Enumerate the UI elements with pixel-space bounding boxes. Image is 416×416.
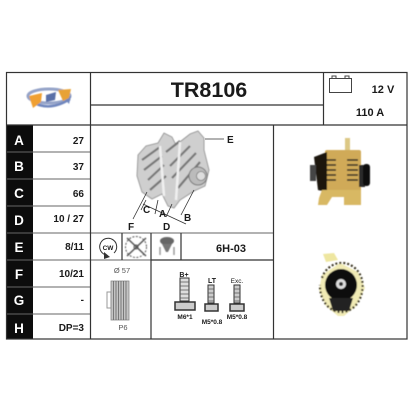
icon: regulator (160, 237, 174, 255)
values: 37 (73, 162, 84, 173)
voltage: 12 V (372, 84, 395, 96)
letter column (6, 125, 33, 339)
bolt: Exc. (227, 278, 248, 321)
icon: crossed pulley (126, 236, 146, 258)
photo: alternator rear view (319, 253, 365, 316)
diagram labels and dimension lines: F (128, 222, 134, 233)
diagram labels and dimension lines: B (184, 213, 191, 224)
diagram labels and dimension lines: D (163, 222, 170, 233)
bolt: Exc.: M5*0.8 (227, 314, 248, 321)
bolt: LT: M5*0.8 (202, 319, 223, 326)
values: 10 / 27 (53, 214, 84, 225)
letter column: C (14, 186, 24, 201)
letter column: F (15, 267, 23, 282)
letter column: D (14, 213, 24, 228)
values (53, 136, 84, 334)
icon: battery (330, 76, 352, 92)
pulley diameter: Ø 57 (114, 266, 130, 275)
pulley rib count: P6 (118, 323, 128, 332)
bolt: B+ (175, 272, 195, 321)
values: 27 (73, 136, 84, 147)
letter column: A (14, 133, 24, 148)
values: 8/11 (65, 242, 84, 253)
bolt: B+: M6*1 (177, 314, 193, 321)
icon: clockwise rotation (100, 238, 117, 259)
photo: alternator side view (310, 138, 370, 205)
values: - (81, 295, 84, 306)
diagram labels and dimension lines (128, 135, 234, 233)
title: TR8106 (171, 78, 247, 102)
values: DP=3 (59, 323, 84, 334)
bolt: LT: LT (208, 278, 217, 285)
values: 66 (73, 189, 84, 200)
letter column: B (14, 159, 24, 174)
letter column: G (14, 293, 24, 308)
icon: clockwise rotation: CW (103, 245, 114, 252)
amperage: 110 A (356, 107, 384, 119)
regulator code: 6H-03 (216, 243, 246, 255)
bolt: LT (202, 278, 223, 326)
values: 10/21 (59, 269, 84, 280)
letter column: E (14, 240, 24, 255)
diagram labels and dimension lines: C (143, 205, 150, 216)
letter column: H (14, 321, 24, 336)
logo (28, 89, 71, 108)
bolt: Exc.: Exc. (231, 278, 244, 285)
diagram labels and dimension lines: A (159, 209, 166, 220)
bolt: B+: B+ (179, 272, 189, 279)
pulley drawing (107, 281, 129, 320)
diagram labels and dimension lines: E (227, 135, 234, 146)
diagram: alternator line drawing (137, 131, 209, 208)
